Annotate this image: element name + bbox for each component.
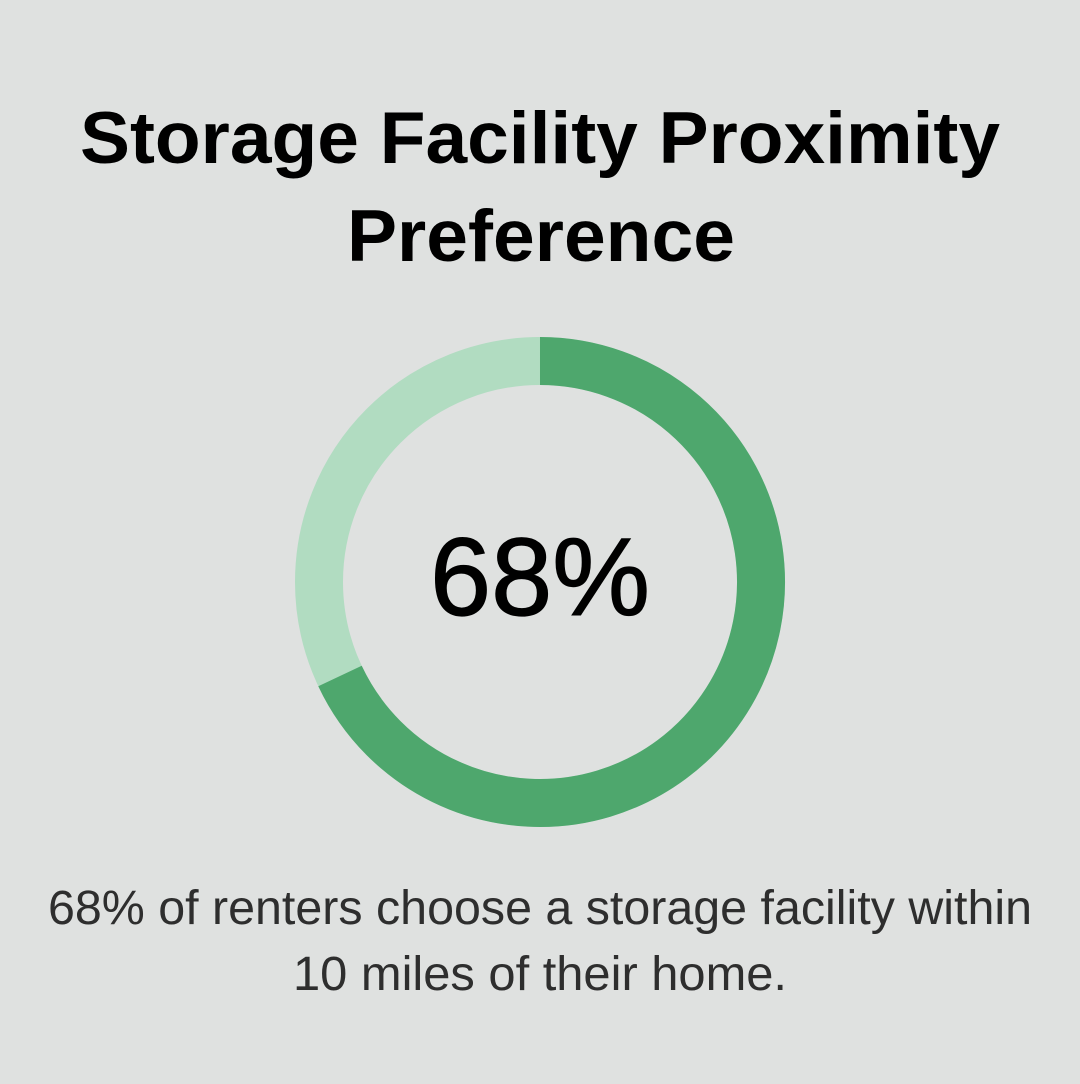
title xyxy=(80,98,1000,277)
caption xyxy=(48,882,1032,1001)
title: Storage Facility Proximity xyxy=(80,98,1000,179)
donut value: 68% xyxy=(430,516,650,639)
donut chart: 68 percent xyxy=(319,361,761,803)
caption: 10 miles of their home. xyxy=(293,948,787,1001)
caption: 68% of renters choose a storage facility within xyxy=(48,882,1032,935)
title: Preference xyxy=(347,196,735,277)
